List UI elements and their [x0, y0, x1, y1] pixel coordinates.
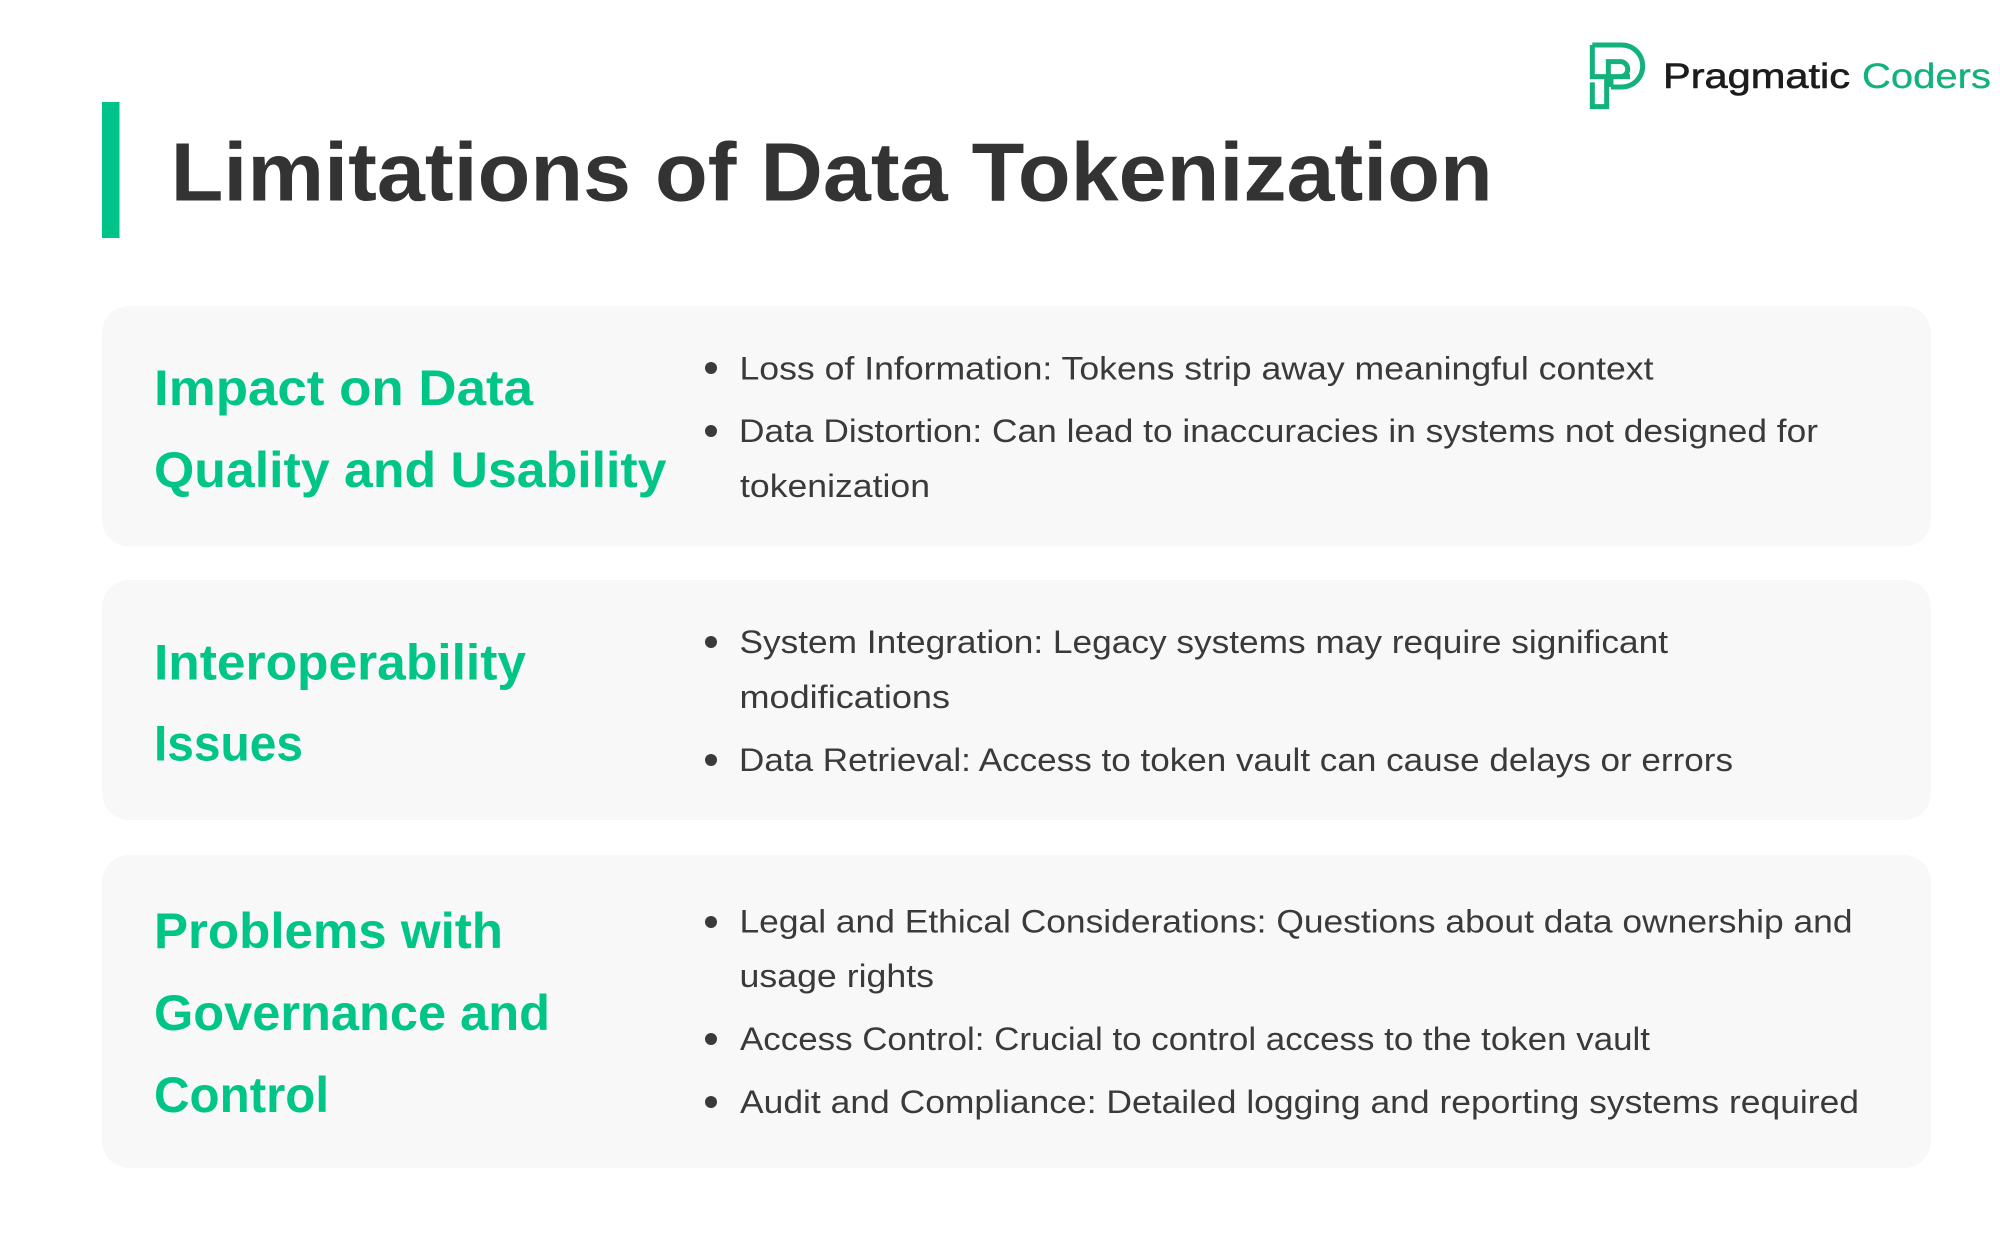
- panel background: [102, 306, 1931, 546]
- panel background: [102, 855, 1931, 1168]
- logo text: Pragmatic: Pragmatic: [1663, 57, 1850, 96]
- logo: Pragmatic Coders: [1592, 45, 1991, 107]
- bullet list: modifications: [740, 679, 950, 715]
- bullet list: System Integration: Legacy systems may require significant: [740, 624, 1668, 660]
- bullet list: [705, 904, 1859, 1120]
- heading: Quality and Usability: [154, 442, 667, 498]
- panel background: [102, 580, 1931, 820]
- icon: P monogram: [1592, 45, 1643, 107]
- bullet list: [705, 624, 1733, 778]
- bullet list: tokenization: [740, 468, 930, 504]
- logo text: Coders: Coders: [1862, 57, 1991, 96]
- panel: interoperability issues: [102, 580, 1931, 820]
- panel: problems with governance and control: [102, 855, 1931, 1168]
- heading: Issues: [154, 716, 303, 772]
- heading: [154, 360, 667, 498]
- heading: [154, 903, 550, 1123]
- bullet list: Legal and Ethical Considerations: Questions about data ownership and: [740, 904, 1852, 940]
- bullet list: Loss of Information: Tokens strip away meaningful context: [740, 350, 1654, 386]
- title accent bar: [102, 102, 120, 238]
- heading: Impact on Data: [154, 360, 534, 416]
- bullet list: [705, 350, 1818, 504]
- heading: Governance and: [154, 985, 550, 1041]
- heading: Interoperability: [154, 634, 526, 690]
- heading: Control: [154, 1067, 329, 1123]
- bullet list: Data Distortion: Can lead to inaccuracies in systems not designed for: [739, 413, 1818, 449]
- bullet list: Access Control: Crucial to control access to the token vault: [740, 1021, 1650, 1057]
- bullet list: Data Retrieval: Access to token vault can cause delays or errors: [739, 742, 1733, 778]
- title: Limitations of Data Tokenization: [171, 126, 1493, 219]
- bullet list: Audit and Compliance: Detailed logging and reporting systems required: [740, 1084, 1859, 1120]
- heading: [154, 634, 526, 772]
- heading: Problems with: [154, 903, 503, 959]
- bullet list: usage rights: [740, 958, 934, 994]
- panel: impact on data quality and usability: [102, 306, 1931, 546]
